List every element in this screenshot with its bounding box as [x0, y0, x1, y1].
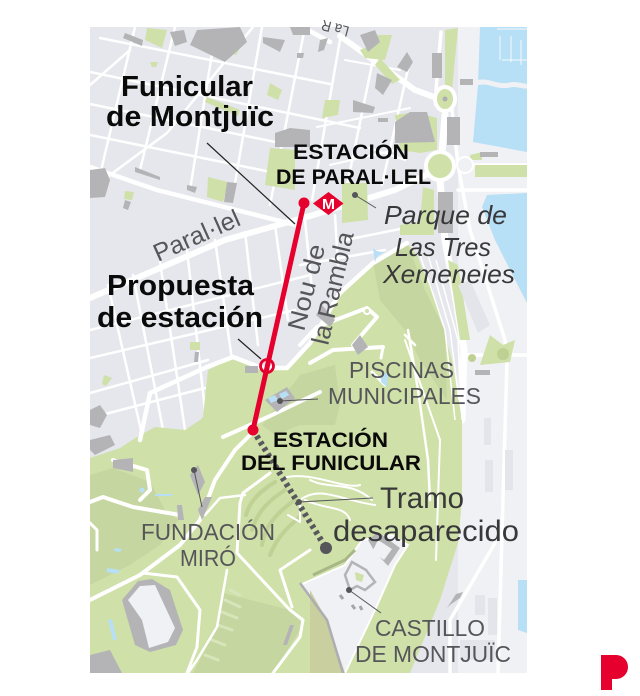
label: Tramo desaparecido: desaparecido	[333, 515, 519, 548]
heading: Propuesta de estación: Propuesta	[107, 270, 255, 302]
heading: Estación de Paral·lel: ESTACIÓN	[293, 140, 409, 164]
label: Parque de Las Tres Xemeneies: Parque de	[384, 200, 507, 230]
heading: Estación del Funicular: ESTACIÓN	[273, 428, 388, 452]
label: Tramo desaparecido	[333, 482, 519, 548]
heading: Estación del Funicular	[241, 428, 421, 475]
dotted line: missing section	[253, 430, 326, 548]
darker park slopes	[90, 243, 447, 673]
buildings	[90, 27, 498, 673]
leader: Tramo	[296, 498, 373, 505]
street grid	[90, 27, 527, 673]
leader: Propuesta	[238, 339, 261, 359]
label: Piscinas Municipales	[328, 357, 481, 409]
dot: Paral·lel station	[298, 198, 310, 208]
water: port	[473, 27, 527, 633]
leader: Piscinas	[277, 398, 318, 404]
logo: red P	[601, 655, 628, 690]
leader: Fundación	[191, 467, 202, 507]
leader: Funicular	[207, 143, 295, 224]
label: Tramo desaparecido: Tramo	[380, 482, 464, 515]
icon: metro diamond	[313, 192, 344, 215]
heading: Propuesta de estación: de estación	[97, 302, 263, 334]
title: Funicular de Montjuïc	[106, 71, 274, 133]
leader: Castillo	[346, 587, 381, 613]
label: Parque de Las Tres Xemeneies: Xemeneies	[382, 259, 515, 289]
roundabouts	[426, 87, 509, 362]
street label: la Rambla: la Rambla	[307, 229, 360, 347]
label: Parque de Las Tres Xemeneies	[382, 200, 515, 289]
dot: Funicular station	[248, 424, 258, 436]
label: Castillo de Montjuïc	[355, 615, 511, 667]
map of Montjuïc and surroundings	[90, 27, 528, 673]
heading: Propuesta de estación	[97, 270, 263, 334]
label: Castillo de Montjuïc: CASTILLO	[375, 615, 485, 641]
railway and coastal road lines	[420, 255, 462, 420]
heading: Estación de Paral·lel: DE PARAL·LEL	[276, 166, 431, 189]
leader: Parque	[352, 192, 376, 208]
title: Funicular de Montjuïc: Funicular	[121, 71, 253, 103]
label: Piscinas Municipales: PISCINAS	[349, 357, 454, 383]
street label: Nou de: Nou de	[283, 241, 331, 333]
parks in the city	[102, 28, 527, 386]
label: Piscinas Municipales: MUNICIPALES	[328, 383, 481, 409]
heading: Estación de Paral·lel	[276, 140, 431, 189]
street label: Paral·lel: Paral·lel	[149, 204, 244, 267]
light castle area	[300, 535, 408, 673]
swimming pools and ponds	[107, 248, 388, 640]
park: Montjuïc mountain	[90, 243, 462, 673]
dot: end of missing section	[320, 542, 332, 554]
stadium	[122, 579, 183, 652]
stripes on slopes	[205, 482, 302, 660]
title: Funicular de Montjuïc: de Montjuïc	[106, 101, 274, 133]
heading: Estación del Funicular: DEL FUNICULAR	[241, 452, 421, 475]
label: Fundación Miró: MIRÓ	[180, 545, 236, 571]
label: Fundación Miró: FUNDACIÓN	[141, 519, 275, 545]
Castillo de Montjuïc fortress	[340, 532, 400, 610]
icon: metro diamond: M	[322, 196, 335, 213]
park roads	[90, 243, 440, 673]
ring: proposed station	[260, 360, 274, 372]
label: Parque de Las Tres Xemeneies: Las Tres	[395, 232, 491, 262]
light port buildings	[458, 280, 513, 660]
street label: La Rambla (upside down): La R	[319, 16, 351, 40]
label: Fundación Miró	[141, 519, 275, 571]
label: Castillo de Montjuïc: DE MONTJUÏC	[355, 641, 511, 667]
red funicular line	[253, 203, 304, 430]
